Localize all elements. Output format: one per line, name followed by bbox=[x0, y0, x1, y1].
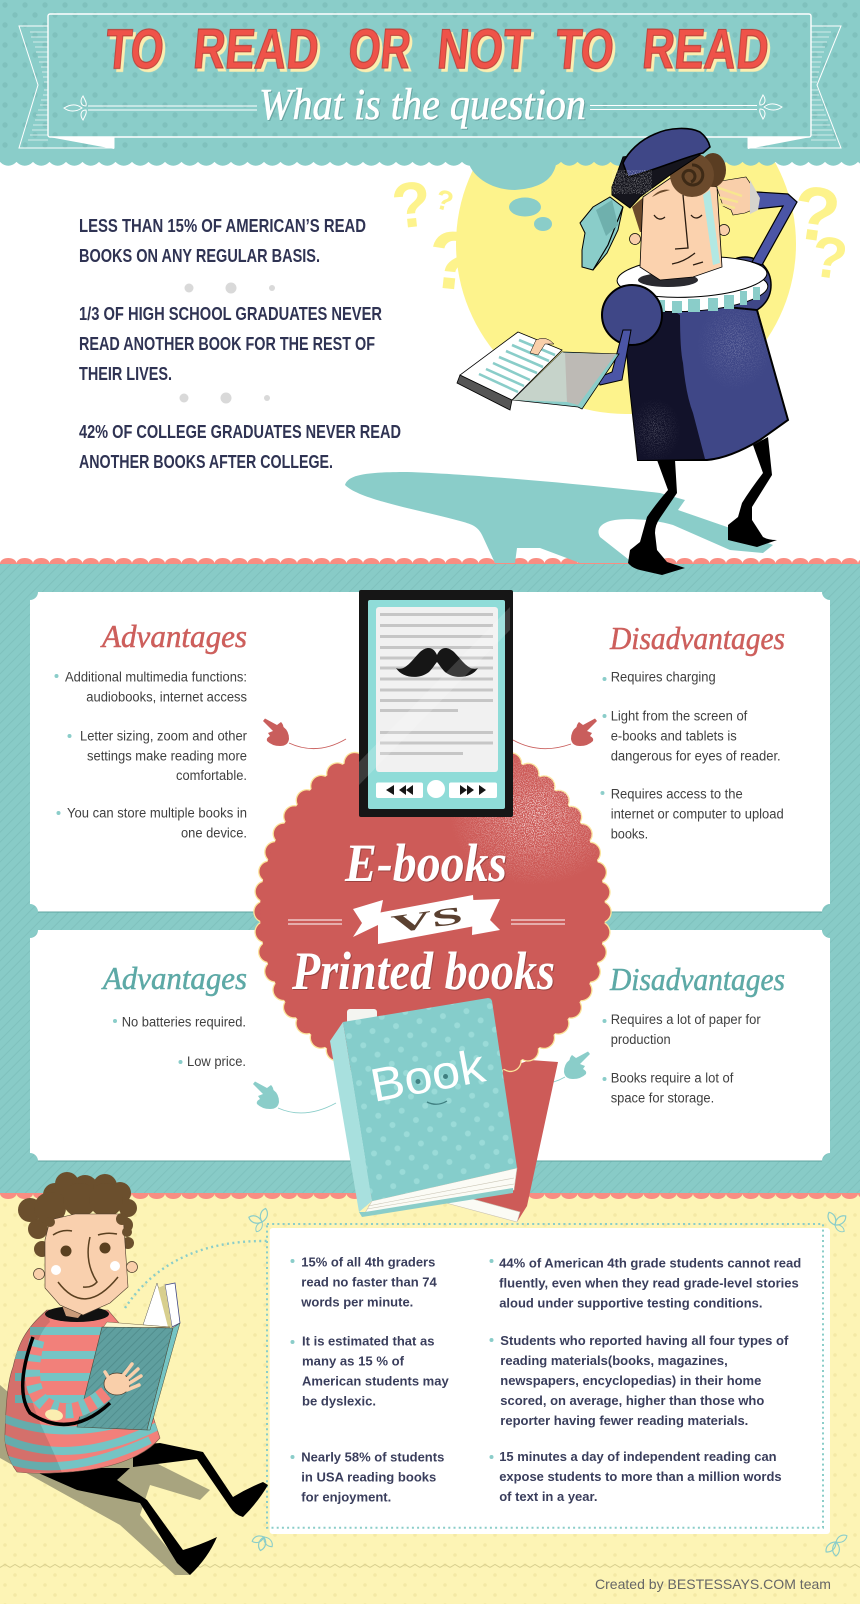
title: NOT bbox=[435, 17, 533, 80]
ribbon tail right bbox=[748, 26, 841, 148]
intro facts: THEIR LIVES. bbox=[79, 364, 172, 384]
column: left facts: many as 15 % of bbox=[302, 1354, 405, 1369]
feather bbox=[580, 197, 623, 270]
list: e-book disadvantages: e-books and tablets is bbox=[611, 729, 737, 744]
list: e-book advantages: You can store multiple books in bbox=[67, 806, 247, 821]
column: right facts: 15 minutes a day of independent reading can bbox=[499, 1449, 777, 1464]
column: right facts: expose students to more than a million words bbox=[499, 1469, 782, 1484]
column: right facts: scored, on average, higher than those who bbox=[500, 1393, 764, 1408]
glass reflection bbox=[359, 607, 510, 785]
man's teal floor shadow bbox=[345, 472, 773, 563]
mustache bbox=[396, 648, 478, 677]
banner frame bbox=[48, 14, 811, 137]
list: printed disadvantages bbox=[602, 1012, 761, 1106]
heading: advantages: Advantages bbox=[101, 960, 247, 996]
flourish right bbox=[760, 95, 782, 119]
hand at temple bbox=[714, 177, 760, 215]
list: e-book advantages: one device. bbox=[181, 826, 247, 841]
speckle texture bbox=[450, 745, 620, 885]
header banner bbox=[0, 0, 860, 190]
player controls bbox=[376, 780, 497, 798]
e-reader tablet bbox=[359, 590, 513, 817]
pointing hand left bbox=[253, 1082, 336, 1113]
face bbox=[51, 1230, 120, 1299]
title: TO bbox=[103, 17, 167, 80]
list: e-book disadvantages: dangerous for eyes of reader. bbox=[611, 749, 781, 764]
chin shadow bbox=[638, 273, 698, 287]
credit line: Created by BESTESSAYS.COM team bbox=[595, 1576, 831, 1592]
intro facts: READ ANOTHER BOOK FOR THE REST OF bbox=[79, 334, 375, 354]
background: teal comparison section bbox=[0, 563, 860, 1194]
arm sleeve bbox=[23, 1337, 110, 1424]
badge rules bbox=[288, 920, 565, 924]
heading: advantages: Advantages bbox=[100, 618, 247, 654]
column: left facts: Nearly 58% of students bbox=[301, 1450, 444, 1465]
bookmark tab bbox=[347, 1009, 377, 1029]
question marks: ? bbox=[423, 213, 483, 309]
list: e-book advantages: Letter sizing, zoom and other bbox=[80, 729, 247, 744]
collar bbox=[45, 1306, 109, 1322]
list: e-book disadvantages: Requires access to the bbox=[611, 787, 743, 802]
scallop edge below comparison bbox=[0, 1193, 860, 1200]
list: e-book advantages: comfortable. bbox=[176, 768, 247, 783]
column: left facts: read no faster than 74 bbox=[301, 1275, 438, 1290]
boy reading character bbox=[0, 1172, 268, 1575]
intro facts: 1/3 OF HIGH SCHOOL GRADUATES NEVER bbox=[79, 304, 382, 324]
near leg bbox=[27, 1468, 217, 1575]
spine bbox=[330, 1022, 372, 1212]
face details bbox=[652, 190, 703, 265]
card bottom edge shadow bbox=[38, 1160, 822, 1162]
corner flourish top right bbox=[826, 1211, 848, 1234]
bottom stats panel bbox=[267, 1224, 830, 1534]
robe bbox=[627, 300, 788, 460]
red back cover of printed book bbox=[420, 1060, 558, 1222]
bullets bbox=[290, 1259, 494, 1459]
column: right facts: aloud under supportive testing conditions. bbox=[499, 1296, 762, 1311]
column: left facts: 15% of all 4th graders bbox=[301, 1255, 435, 1270]
far leg bbox=[728, 437, 777, 547]
card: e-book advantages and disadvantages bbox=[30, 592, 830, 912]
question marks: ? bbox=[432, 183, 457, 218]
lower cover edge bbox=[359, 1188, 513, 1217]
front arm bbox=[597, 330, 631, 385]
open book bbox=[457, 332, 619, 410]
thought bubble hanging from banner bbox=[467, 155, 557, 190]
intro facts: 42% OF COLLEGE GRADUATES NEVER READ bbox=[79, 422, 401, 442]
column: right facts: fluently, even when they read grade-level stories bbox=[499, 1276, 799, 1291]
column: right facts: of text in a year. bbox=[499, 1489, 598, 1504]
dotted connector from boy to panel bbox=[125, 1241, 267, 1308]
list: e-book disadvantages: Light from the screen of bbox=[611, 709, 748, 724]
list: e-book disadvantages: internet or computer to upload bbox=[611, 807, 784, 822]
subtitle: What is the question bbox=[259, 80, 586, 129]
list: printed disadvantages: space for storage. bbox=[611, 1091, 714, 1106]
question marks: ? bbox=[787, 169, 845, 260]
vs ribbon: VS bbox=[390, 902, 465, 939]
ears bbox=[34, 1262, 138, 1280]
man reading character bbox=[457, 128, 797, 575]
question marks: ? bbox=[807, 223, 851, 293]
list: e-book advantages bbox=[54, 670, 247, 841]
list: printed disadvantages: production bbox=[611, 1032, 671, 1047]
list: printed advantages: No batteries required. bbox=[122, 1015, 246, 1030]
hair bangs bbox=[45, 1213, 132, 1237]
ribbon folds bbox=[49, 137, 811, 149]
card bottom edge shadow bbox=[38, 911, 822, 913]
list: e-book advantages: audiobooks, internet access bbox=[86, 690, 247, 705]
ground shadow bbox=[0, 1385, 210, 1575]
hand on book bbox=[104, 1364, 141, 1395]
robe speckle lower left bbox=[629, 398, 681, 462]
list: printed advantages: Low price. bbox=[187, 1054, 246, 1069]
raised arm bbox=[748, 192, 797, 265]
title: READ bbox=[191, 17, 322, 80]
column: left facts: for enjoyment. bbox=[301, 1490, 391, 1505]
badge headline: printed books: Printed books bbox=[291, 941, 555, 1001]
title: TO bbox=[553, 17, 617, 80]
pages bbox=[365, 1168, 517, 1213]
back shoulder bbox=[719, 257, 771, 313]
hair curls bbox=[670, 153, 726, 197]
list: printed disadvantages: Books require a lot of bbox=[611, 1071, 734, 1086]
scallop edge above comparison bbox=[0, 557, 860, 564]
intro facts bbox=[79, 216, 401, 472]
corner flourish top left bbox=[248, 1208, 269, 1233]
intro facts: LESS THAN 15% OF AMERICAN’S READ bbox=[79, 216, 366, 236]
tear stripe bbox=[703, 190, 720, 265]
near leg bbox=[628, 460, 685, 575]
question marks bbox=[388, 167, 851, 309]
ribbon tail left bbox=[19, 26, 114, 148]
column: right facts: 44% of American 4th grade students cannot read bbox=[499, 1256, 801, 1271]
elbow patch bbox=[44, 1408, 64, 1422]
cover bbox=[343, 998, 517, 1201]
column: left facts: be dyslexic. bbox=[302, 1394, 376, 1409]
list: e-book disadvantages: Requires charging bbox=[611, 670, 716, 685]
head bbox=[640, 177, 722, 280]
background: yellow sun circle bbox=[456, 74, 796, 414]
badge headline: e-books: E-books bbox=[344, 833, 507, 893]
list: e-book advantages: settings make reading more bbox=[87, 749, 247, 764]
cover word: Book bbox=[366, 1038, 489, 1112]
column: left facts bbox=[300, 1255, 449, 1505]
list: printed advantages bbox=[113, 1015, 246, 1069]
dotted border bbox=[267, 1224, 823, 1528]
intro facts: ANOTHER BOOKS AFTER COLLEGE. bbox=[79, 452, 333, 472]
heading: disadvantages: Disadvantages bbox=[609, 961, 785, 997]
column: left facts: American students may bbox=[302, 1374, 449, 1389]
list: printed disadvantages: Requires a lot of paper for bbox=[611, 1012, 761, 1027]
heading: disadvantages: Disadvantages bbox=[609, 620, 785, 656]
list: e-book disadvantages: books. bbox=[611, 827, 648, 842]
hair bbox=[18, 1172, 137, 1257]
cover face bbox=[416, 1074, 448, 1104]
robe speckle right bbox=[697, 300, 773, 390]
screen text lines bbox=[380, 614, 493, 754]
column: right facts: reporter having fewer reading materials. bbox=[500, 1413, 748, 1428]
pointing hand right bbox=[505, 1052, 590, 1084]
flourish left bbox=[64, 96, 86, 120]
vs ribbon bbox=[353, 895, 500, 944]
hair behind face bbox=[632, 195, 646, 232]
pointing hand left bbox=[263, 718, 346, 749]
far leg bbox=[133, 1443, 268, 1517]
column: right facts: newspapers, encyclopedias) in their home bbox=[500, 1373, 761, 1388]
hat bbox=[612, 128, 710, 208]
intro facts: BOOKS ON ANY REGULAR BASIS. bbox=[79, 246, 320, 266]
book bbox=[77, 1283, 180, 1430]
question marks: ? bbox=[388, 167, 435, 243]
column: left facts: in USA reading books bbox=[301, 1470, 436, 1485]
card: printed book advantages and disadvantages bbox=[30, 930, 830, 1161]
column: left facts: It is estimated that as bbox=[302, 1334, 434, 1349]
thumb bbox=[530, 338, 554, 355]
head bbox=[45, 1214, 128, 1315]
list: e-book disadvantages bbox=[600, 670, 784, 842]
dot separators bbox=[180, 282, 275, 404]
neck bbox=[60, 1300, 85, 1318]
column: right facts: Students who reported having all four types of bbox=[500, 1333, 789, 1348]
subtitle rules bbox=[88, 106, 757, 110]
sweater bbox=[0, 1310, 160, 1473]
column: left facts: words per minute. bbox=[300, 1295, 413, 1310]
collar band bbox=[619, 266, 769, 316]
title bbox=[103, 17, 772, 80]
collar top bbox=[616, 253, 768, 301]
printed book bbox=[330, 998, 520, 1222]
title: READ bbox=[640, 17, 772, 80]
front shoulder bbox=[602, 285, 662, 345]
ears bbox=[630, 224, 730, 244]
corner flourish bottom left bbox=[251, 1534, 274, 1551]
red book pages bbox=[420, 1186, 520, 1222]
background: yellow footer section bbox=[0, 1193, 860, 1604]
wavy rule bbox=[0, 1563, 860, 1569]
red scalloped badge bbox=[260, 740, 620, 1084]
list: e-book advantages: Additional multimedia functions: bbox=[65, 670, 247, 685]
corner flourish bottom right bbox=[824, 1533, 848, 1556]
column: right facts bbox=[499, 1256, 801, 1504]
title: OR bbox=[346, 17, 414, 80]
pointing hand right bbox=[513, 718, 597, 749]
thought bubbles bbox=[509, 198, 552, 231]
column: right facts: reading materials(books, magazines, bbox=[500, 1353, 728, 1368]
